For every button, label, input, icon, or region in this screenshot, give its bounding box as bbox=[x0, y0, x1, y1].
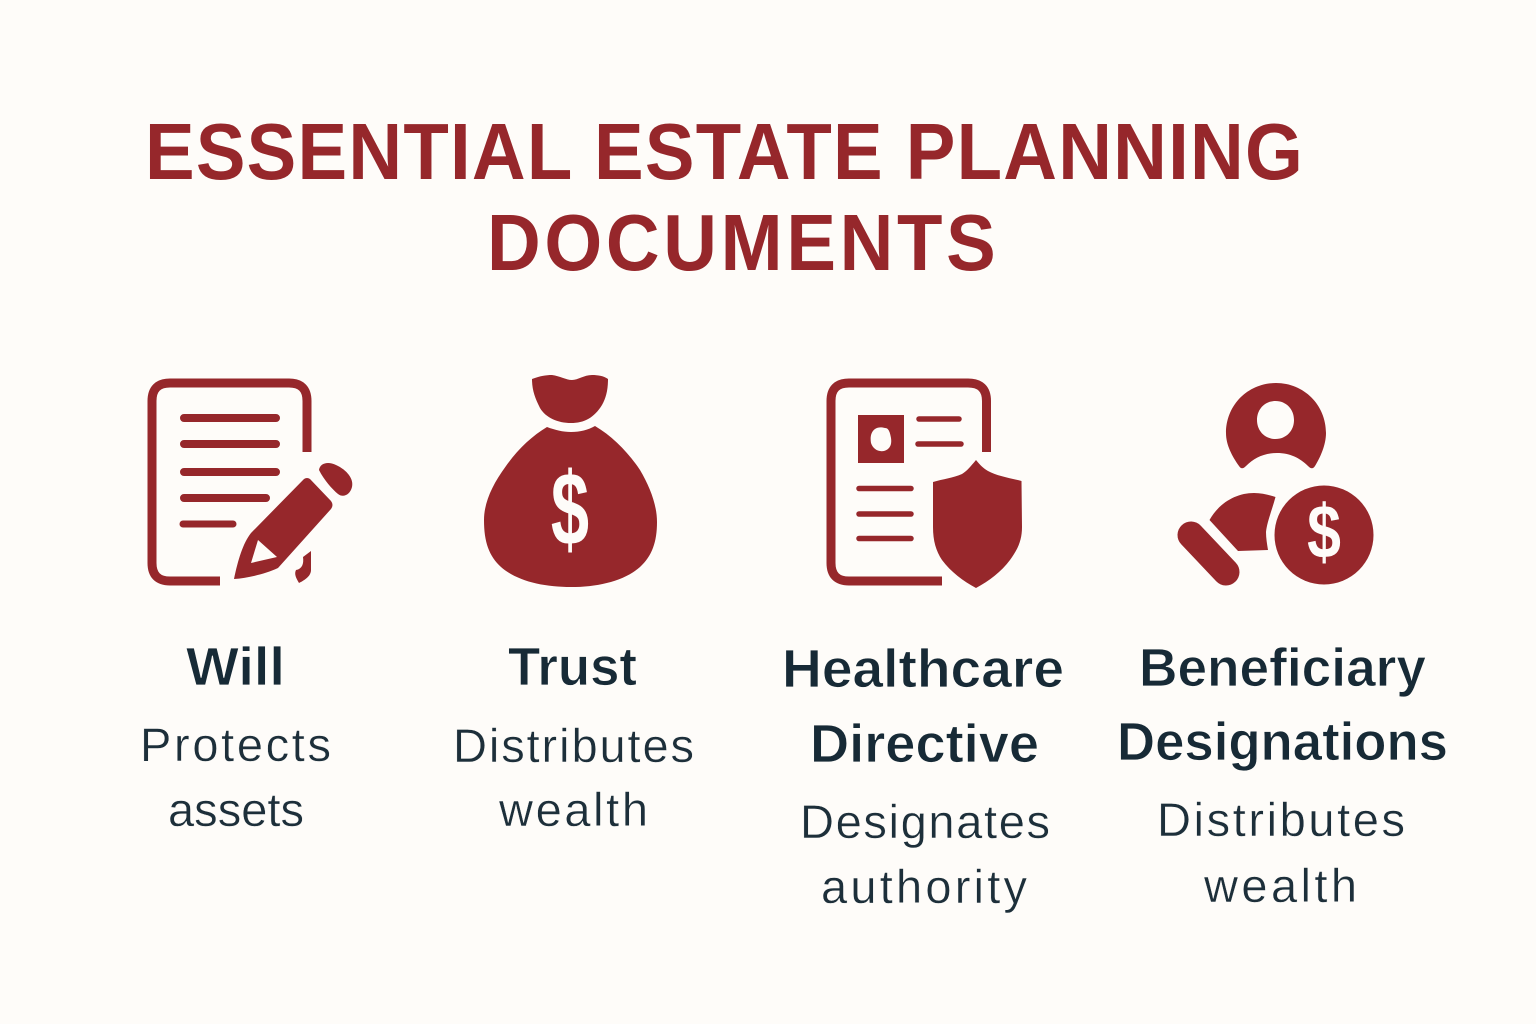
panel: trust bbox=[453, 375, 694, 836]
panel: will bbox=[140, 383, 352, 836]
icon: document with shield bbox=[831, 383, 1022, 588]
title bbox=[145, 108, 1303, 288]
description: healthcare directive: authority bbox=[821, 860, 1028, 913]
description: beneficiary designations: Distributes bbox=[1157, 793, 1405, 846]
title: DOCUMENTS bbox=[487, 199, 996, 288]
heading: beneficiary designations: Designations bbox=[1117, 712, 1448, 772]
heading: healthcare directive: Healthcare bbox=[782, 639, 1064, 699]
description: will: Protects bbox=[140, 718, 331, 771]
heading: trust: Trust bbox=[508, 637, 637, 697]
icon: money bag bbox=[484, 375, 657, 587]
heading: healthcare directive: Directive bbox=[810, 714, 1039, 774]
icon: person, hand and coin bbox=[1191, 383, 1374, 584]
panel: beneficiary designations bbox=[1117, 383, 1448, 912]
dollar sign: $ bbox=[551, 451, 589, 567]
description: healthcare directive bbox=[800, 795, 1050, 913]
panel: healthcare directive bbox=[782, 383, 1064, 913]
title: ESSENTIAL ESTATE PLANNING bbox=[145, 108, 1303, 197]
heading: beneficiary designations bbox=[1117, 638, 1448, 772]
description: trust bbox=[453, 719, 694, 836]
description: trust: Distributes bbox=[453, 719, 694, 772]
heading: healthcare directive bbox=[782, 639, 1064, 774]
description: beneficiary designations bbox=[1157, 793, 1405, 912]
description: trust: wealth bbox=[498, 783, 648, 836]
heading: will: Will bbox=[186, 637, 285, 697]
description: will bbox=[140, 718, 331, 836]
description: beneficiary designations: wealth bbox=[1203, 859, 1357, 912]
description: healthcare directive: Designates bbox=[800, 795, 1050, 848]
icon: document with pencil bbox=[152, 383, 352, 583]
dollar sign: $ bbox=[1307, 490, 1341, 575]
description: will: assets bbox=[168, 783, 304, 836]
heading: beneficiary designations: Beneficiary bbox=[1139, 638, 1426, 698]
